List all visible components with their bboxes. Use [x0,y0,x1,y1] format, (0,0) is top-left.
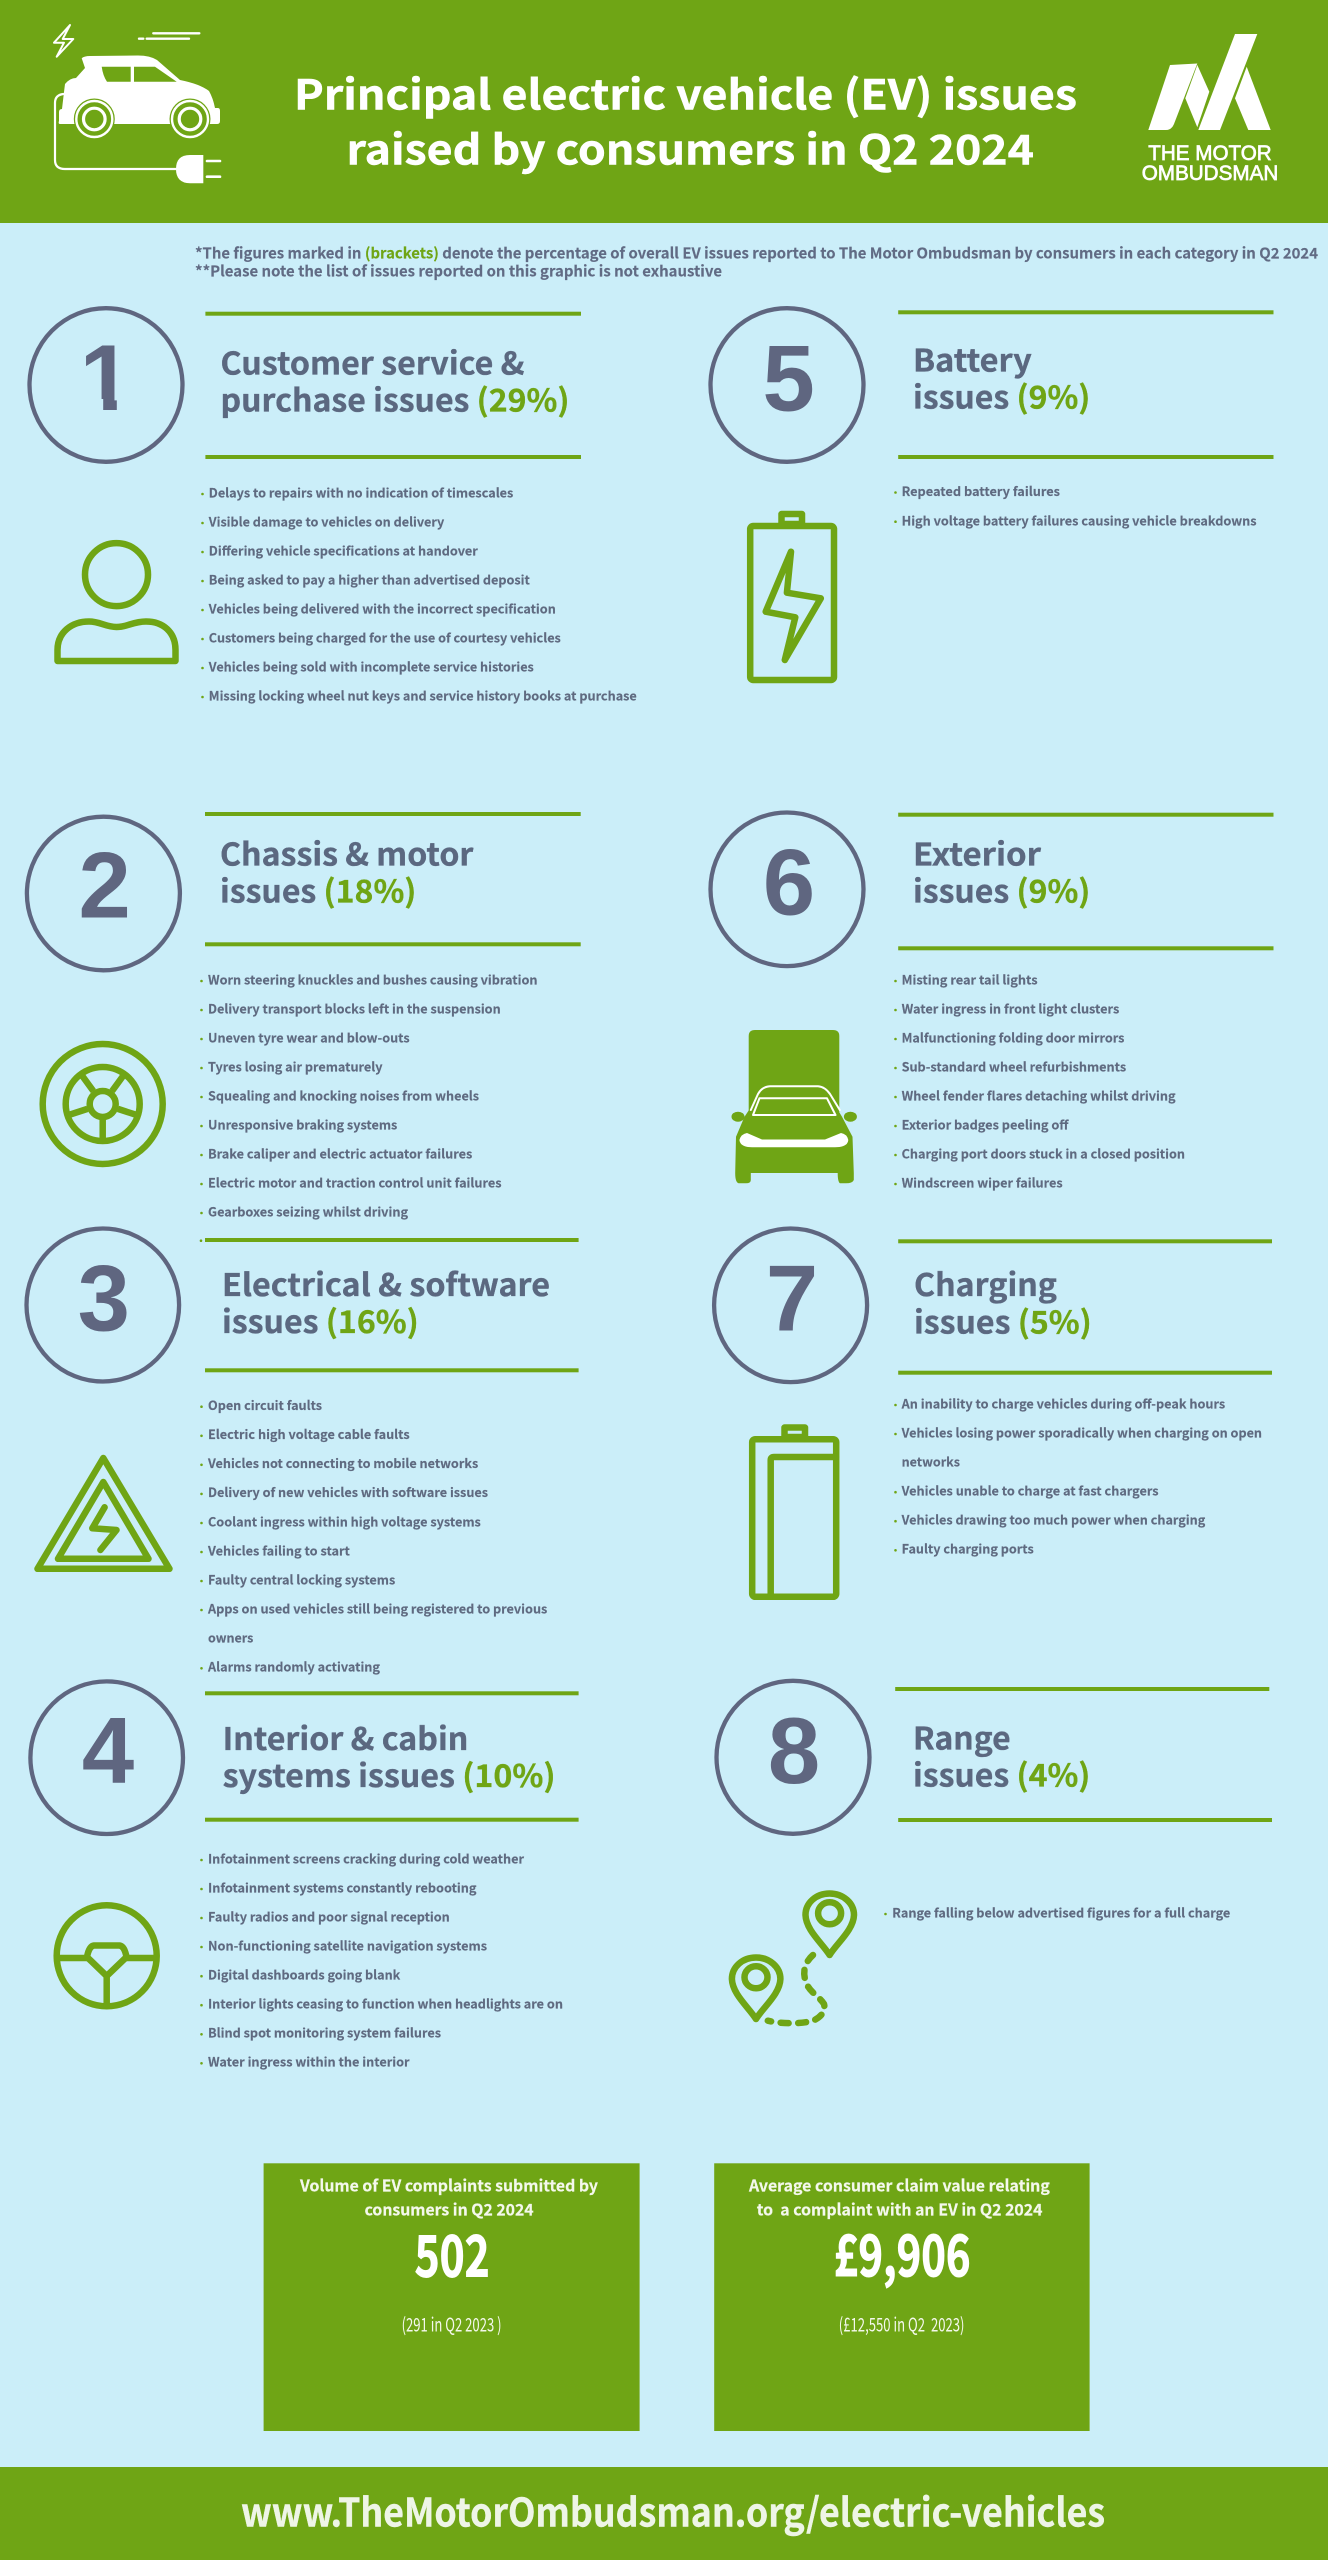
panel: 3 electrical and software issues [26,1228,579,1676]
heading 2: Chassis & motor [220,830,474,875]
issue list 1: Customers being charged for the use of courtesy vehicles [209,627,561,646]
heading 5 [898,310,1274,459]
icon: steering wheel [57,1905,157,2006]
number badge 6 [710,812,864,966]
heading 1: Customer service & [220,338,525,383]
logo: The Motor Ombudsman: THE MOTOR [1148,142,1272,165]
footer banner with web address [0,2467,1328,2560]
heading 4: Interior & cabin [223,1714,468,1759]
issue list 3: Apps on used vehicles still being registered to previous [207,1598,547,1618]
icon: car front [732,1030,857,1183]
heading 4: systems issues (10%) [223,1751,556,1796]
issue list 3: Delivery of new vehicles with software issues [208,1482,488,1501]
issue list 6: Windscreen wiper failures [902,1172,1063,1191]
issue list 5: High voltage battery failures causing vehicle breakdowns [902,510,1257,529]
issue list 1: Differing vehicle specifications at handover [209,540,478,559]
number badge 4 [30,1681,183,1834]
heading 2 [205,812,581,946]
issue list 2: Gearboxes seizing whilst driving [208,1202,408,1220]
panel: 8 range issues [716,1681,1272,2023]
issue list 2: Delivery transport blocks left in the suspension [208,998,501,1017]
number badge 1 [30,308,182,462]
footer banner with web address: www.TheMotorOmbudsman.org/electric-vehicles [241,2483,1105,2539]
issue list 2: Uneven tyre wear and blow-outs [208,1027,410,1046]
number badge 5: 5 [763,326,815,430]
panel: 4 interior and cabin systems issues [30,1681,579,2071]
heading 5: issues (9%) [913,373,1090,418]
panel: 7 charging issues [714,1228,1272,1597]
icon: charging battery [752,1428,836,1597]
panel: 2 chassis and motor issues [27,812,581,1220]
issue list 2: Electric motor and traction control unit failures [208,1172,502,1191]
stat card: complaint volume: (291 in Q2 2023 ) [402,2311,502,2338]
issue list 7: Faulty charging ports [902,1539,1034,1558]
footnotes: *The figures marked in (brackets) denote the percentage of overall EV issues reported to The Motor Ombudsman by consumers in each category in Q2 2024 [195,242,1318,263]
issue list 6: Malfunctioning folding door mirrors [902,1027,1124,1046]
issue list 6: Water ingress in front light clusters [902,998,1119,1017]
icon: wheel [43,1044,163,1164]
panel: 5 battery issues [710,308,1274,680]
heading 6: Exterior [913,830,1042,875]
number badge 2 [27,817,180,970]
title [294,61,1077,176]
stat card: complaint volume: consumers in Q2 2024 [365,2197,534,2221]
issue list 6 [894,969,1185,1191]
issue list 3: Electric high voltage cable faults [208,1424,410,1443]
heading 7 [898,1239,1272,1375]
heading 2: issues (18%) [220,866,416,911]
issue list 3: owners [208,1628,253,1647]
heading 6 [898,813,1274,950]
issue list 2: Unresponsive braking systems [208,1114,397,1133]
issue list 7 [894,1393,1262,1558]
issue list 6: Wheel fender flares detaching whilst driving [902,1085,1176,1104]
issue list 6: Sub-standard wheel refurbishments [902,1056,1126,1075]
issue list 7: networks [902,1451,960,1470]
issue list 2: Squealing and knocking noises from wheels [208,1085,479,1104]
logo: The Motor Ombudsman: OMBUDSMAN [1142,162,1278,185]
stat card: average claim value: to a complaint with an EV in Q2 2024 [757,2197,1042,2221]
stat card: average claim value: Average consumer claim value relating [748,2173,1050,2197]
issue list 3: Coolant ingress within high voltage systems [208,1511,481,1530]
heading 1 [205,312,581,459]
number badge 6: 6 [763,830,815,934]
stat card: average claim value [714,2163,1090,2431]
issue list 4: Digital dashboards going blank [208,1964,401,1984]
heading 6: issues (9%) [913,867,1090,912]
issue list 6: Misting rear tail lights [902,969,1038,988]
issue list 7: Vehicles unable to charge at fast chargers [901,1480,1159,1500]
title: raised by consumers in Q2 2024 [346,116,1034,176]
heading 1: purchase issues (29%) [220,376,570,421]
heading 3: issues (16%) [222,1297,419,1342]
number badge 7: 7 [766,1246,818,1351]
issue list 2: Brake caliper and electric actuator failures [208,1143,472,1162]
footnotes: **Please note the list of issues reported on this graphic is not exhaustive [195,261,722,282]
issue list 3: Open circuit faults [208,1395,322,1414]
header banner [0,0,1328,223]
footnotes [195,242,1318,282]
number badge 5 [710,308,864,462]
heading 3 [200,1238,579,1372]
issue list 4: Blind spot monitoring system failures [208,2023,441,2042]
issue list 3: Vehicles failing to start [207,1540,351,1559]
heading 8: issues (4%) [913,1750,1090,1795]
stat card: average claim value: (£12,550 in Q2 2023) [839,2311,964,2338]
issue list 5: Repeated battery failures [902,481,1060,500]
heading 3: Electrical & software [222,1260,550,1305]
issue list 4: Faulty radios and poor signal reception [208,1906,450,1925]
heading 8: Range [913,1713,1011,1758]
heading 7: Charging [914,1260,1057,1305]
number badge 4: 4 [82,1698,134,1803]
heading 5: Battery [913,336,1032,381]
issue list 2: Worn steering knuckles and bushes causing vibration [208,969,538,988]
issue list 8: Range falling below advertised figures for a full charge [892,1902,1230,1921]
stat card: average claim value: £9,906 [834,2211,970,2293]
issue list 1: Missing locking wheel nut keys and service history books at purchase [209,686,637,704]
issue list 6: Exterior badges peeling off [902,1114,1069,1133]
heading 7: issues (5%) [914,1297,1092,1342]
issue list 6: Charging port doors stuck in a closed position [902,1143,1185,1162]
stat card: complaint volume [264,2163,640,2431]
issue list 4: Non-functioning satellite navigation systems [208,1936,487,1954]
issue list 4: Infotainment systems constantly rebooting [208,1877,477,1896]
icon: battery with bolt [750,514,834,680]
issue list 3: Alarms randomly activating [207,1657,380,1676]
issue list 1: Visible damage to vehicles on delivery [208,511,445,530]
issue list 5 [894,481,1257,529]
icon: person [58,543,176,661]
icon: electric car with charging cable [54,25,220,183]
issue list 1: Delays to repairs with no indication of timescales [209,482,513,501]
issue list 1: Vehicles being sold with incomplete service histories [208,656,534,675]
issue list 3: Faulty central locking systems [208,1569,395,1588]
stat card: complaint volume: 502 [415,2212,490,2294]
number badge 8 [716,1681,870,1834]
issue list 4: Interior lights ceasing to function when headlights are on [208,1994,563,2013]
heading 8 [895,1687,1272,1822]
number badge 2: 2 [78,833,131,938]
issue list 7: An inability to charge vehicles during off-peak hours [901,1393,1225,1412]
issue list 4: Infotainment screens cracking during cold weather [208,1848,524,1867]
number badge 8: 8 [768,1698,820,1803]
title: Principal electric vehicle (EV) issues [294,61,1077,121]
number badge 1: 1 [80,325,132,430]
issue list 4: Water ingress within the interior [208,2052,410,2071]
issue list 2 [200,969,537,1220]
issue list 1 [201,482,637,704]
number badge 7 [714,1228,867,1382]
panel: 6 exterior issues [710,812,1274,1191]
icon: route between map pins [732,1894,854,2023]
icon: high voltage warning triangle [38,1458,170,1569]
issue list 4 [200,1848,563,2071]
issue list 3: Vehicles not connecting to mobile networks [207,1453,478,1472]
stat card: complaint volume: Volume of EV complaints submitted by [299,2173,598,2197]
issue list 7: Vehicles drawing too much power when charging [901,1510,1206,1529]
number badge 3 [26,1228,179,1382]
issue list 3 [200,1395,547,1676]
heading 4 [205,1691,579,1822]
logo: The Motor Ombudsman [1142,34,1278,185]
issue list 1: Vehicles being delivered with the incorrect specification [208,598,556,617]
panel: 1 customer service and purchase issues [30,308,637,704]
issue list 1: Being asked to pay a higher than advertised deposit [209,569,530,588]
issue list 7: Vehicles losing power sporadically when charging on open [901,1422,1262,1441]
issue list 2: Tyres losing air prematurely [208,1056,383,1075]
number badge 3: 3 [78,1246,130,1350]
